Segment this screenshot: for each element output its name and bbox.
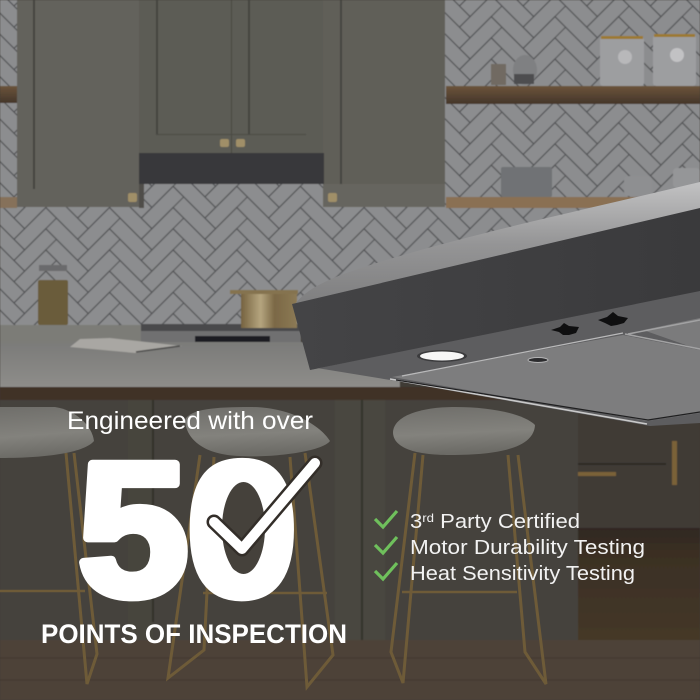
item: 3rd party certified: 3 xyxy=(410,511,421,533)
featured range hood xyxy=(292,182,700,426)
tiled wall xyxy=(0,0,700,335)
stool 1 xyxy=(0,407,97,684)
gold pot xyxy=(230,290,298,328)
wall cabinets xyxy=(17,0,445,208)
filter divider xyxy=(625,320,700,349)
lower cabinets xyxy=(0,387,700,640)
small sensor xyxy=(528,358,548,362)
item: heat sensitivity testing: Heat Sensitivity Testing xyxy=(410,563,635,585)
subheading: points of inspection: POINTS OF INSPECTION xyxy=(41,619,347,649)
stool 2 xyxy=(168,407,333,687)
wood floor xyxy=(0,640,700,700)
wooden shelves xyxy=(0,86,700,208)
second filter xyxy=(643,318,700,350)
open magazine xyxy=(70,338,182,353)
big number 50: 50 xyxy=(78,424,297,636)
item: motor durability testing: Motor Durability Testing xyxy=(410,537,645,559)
main grease filter xyxy=(392,335,700,421)
glass jar xyxy=(38,265,68,325)
hood top glow xyxy=(292,182,700,305)
hood front panel xyxy=(292,208,700,370)
hood LED light xyxy=(417,350,467,362)
zero counter opening xyxy=(222,482,265,574)
item: 3rd party certified xyxy=(375,511,580,533)
bar stools xyxy=(0,407,546,687)
background range hood xyxy=(139,153,324,184)
control knob 1 xyxy=(551,323,579,335)
stool 3 xyxy=(391,407,546,684)
checklist xyxy=(375,511,645,585)
headline text: Engineered with over xyxy=(67,407,313,435)
check mark over the zero xyxy=(214,463,315,549)
hood underside plate xyxy=(310,288,700,426)
item: 3rd party certified: Party Certified xyxy=(434,511,580,533)
control knob 2 xyxy=(598,312,628,326)
back counter and stove xyxy=(0,324,400,387)
shelf items xyxy=(491,34,700,197)
item: 3rd party certified: rd xyxy=(422,511,434,525)
